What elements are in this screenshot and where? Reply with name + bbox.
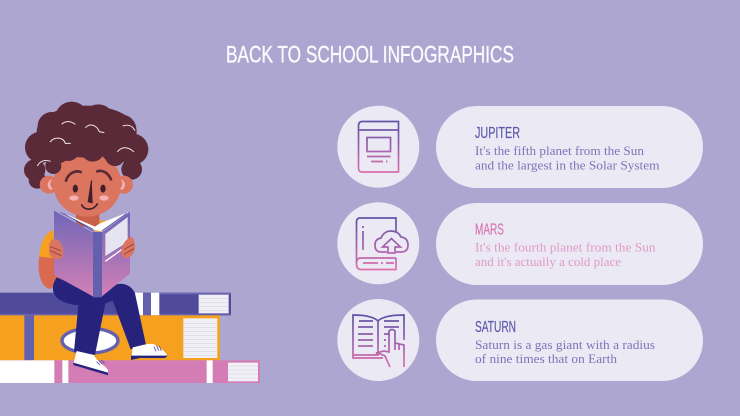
text: Saturn description [475,337,655,366]
legs [53,277,146,355]
hair [24,102,148,189]
text: Mars description: and it's actually a cold place [475,254,621,269]
shirt and arm [39,220,107,289]
open book [54,211,130,297]
icon: book with cover [337,106,419,188]
illustration: boy reading on books [0,102,260,383]
ears [40,176,133,194]
head [53,151,121,227]
text: Jupiter description [475,143,660,172]
book stack [0,293,260,383]
text: Mars description: It's the fourth planet from the Sun [475,240,656,254]
panel: Mars [436,203,703,285]
text: Jupiter description: and the largest in the Solar System [475,158,660,172]
text: Saturn description: Saturn is a gas giant with a radius [475,337,655,352]
shoes [73,344,168,375]
panel: Saturn [436,300,703,381]
icon: book with cloud upload [337,202,419,284]
heading: Saturn: SATURN [475,319,516,336]
panel: Jupiter [436,106,703,188]
heading: Jupiter: JUPITER [475,125,520,142]
text: Mars description [475,240,656,269]
text: Jupiter description: It's the fifth planet from the Sun [475,143,644,158]
hands [49,237,135,259]
text: Saturn description: of nine times that on Earth [475,351,618,366]
title: BACK TO SCHOOL INFOGRAPHICS [226,42,514,68]
heading: Mars: MARS [475,222,504,238]
icon: open book with pointing hand [337,299,419,381]
